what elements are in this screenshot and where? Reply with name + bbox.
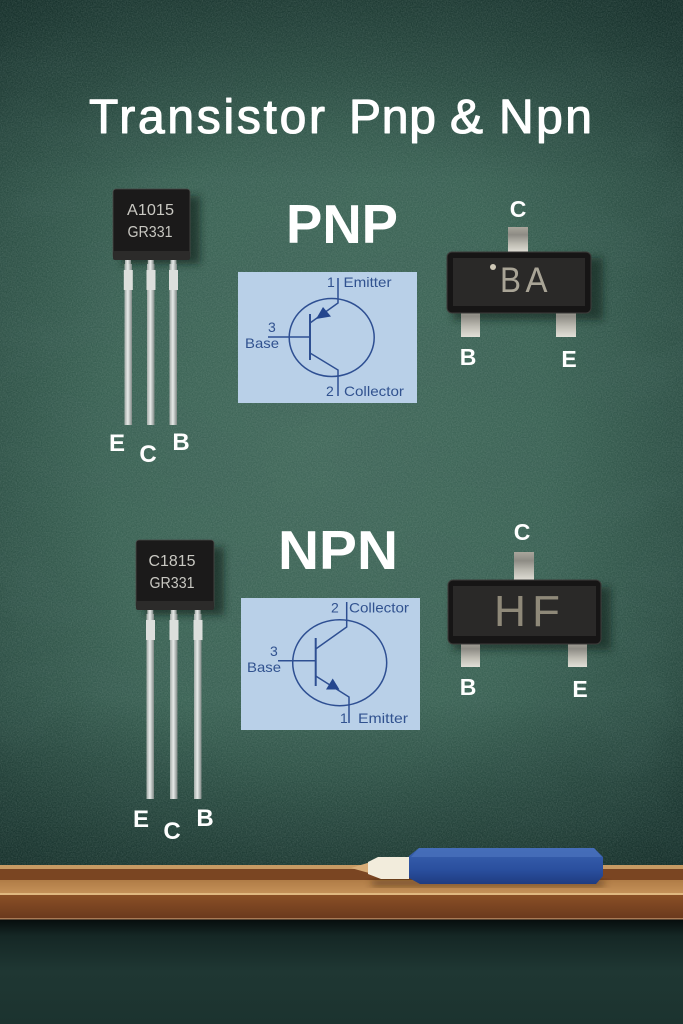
- package: [447, 252, 591, 313]
- arrow: [326, 678, 340, 690]
- package: [136, 540, 214, 609]
- pin labels: PNP through-hole: [109, 429, 190, 468]
- blue barrel: [409, 848, 603, 884]
- pin labels: PNP SMD: C: [510, 196, 526, 222]
- pin labels: NPN SMD: E: [572, 676, 588, 702]
- package marking: C1815: [148, 553, 196, 570]
- shadow: [145, 547, 224, 615]
- wood tip: [351, 862, 369, 873]
- pin labels: NPN SMD: B: [460, 674, 476, 700]
- pin labels: PNP SMD: [460, 196, 577, 372]
- pin labels: PNP through-hole: C: [139, 441, 157, 468]
- labels: Collector: [349, 600, 409, 616]
- labels: 2: [326, 383, 334, 399]
- labels: Emitter: [358, 710, 408, 726]
- shadow: [453, 258, 603, 320]
- pin labels: NPN through-hole: E: [133, 806, 149, 833]
- marking: F: [532, 587, 560, 636]
- package: [448, 580, 601, 644]
- NPN schematic card: [241, 598, 420, 730]
- wooden chalk ledge: [0, 865, 683, 920]
- title: [89, 91, 592, 144]
- labels: 3: [268, 319, 276, 335]
- marking: H: [494, 587, 526, 636]
- title: Pnp: [349, 91, 436, 144]
- labels: Base: [247, 659, 281, 675]
- heading: NPN: NPN: [278, 519, 398, 581]
- shadow on ledge: [372, 880, 604, 886]
- PNP through-hole transistor A1015: [113, 189, 200, 425]
- shadow: [122, 196, 200, 264]
- pin labels: NPN through-hole: B: [196, 805, 214, 832]
- labels: 3: [270, 643, 278, 659]
- labels: Base: [245, 335, 279, 351]
- dark wall below ledge: [0, 919, 683, 1024]
- white collar: [368, 857, 409, 879]
- symbol: [268, 278, 374, 396]
- labels: 2: [331, 600, 339, 616]
- package marking: A1015: [127, 202, 174, 219]
- marking: B: [500, 261, 521, 300]
- NPN through-hole transistor C1815: [136, 540, 224, 799]
- pin labels: PNP SMD: E: [561, 346, 577, 372]
- labels: 1: [327, 274, 335, 290]
- package marking: [148, 553, 196, 592]
- marking: [494, 587, 560, 636]
- heading: PNP: PNP: [286, 193, 398, 255]
- leads: [508, 227, 528, 253]
- title: Transistor: [89, 91, 325, 144]
- NPN SMD transistor HF: [448, 552, 611, 667]
- pin labels: NPN SMD: [460, 519, 588, 702]
- package: [113, 189, 190, 259]
- title: &: [450, 91, 483, 144]
- labels: Collector: [344, 383, 404, 399]
- marking: A: [526, 261, 548, 300]
- labels: Emitter: [344, 274, 392, 290]
- labels: [245, 274, 404, 399]
- arrow: [316, 307, 331, 319]
- labels: 1: [340, 710, 348, 726]
- package marking: GR331: [150, 575, 195, 592]
- pin labels: NPN through-hole: C: [163, 818, 181, 845]
- title: Npn: [499, 91, 592, 144]
- pin labels: NPN through-hole: [133, 805, 214, 845]
- leads: [146, 605, 202, 799]
- pin labels: NPN SMD: C: [514, 519, 530, 545]
- pin labels: PNP through-hole: E: [109, 430, 125, 457]
- package marking: GR331: [128, 224, 173, 241]
- pin labels: PNP through-hole: B: [172, 429, 190, 456]
- pin labels: PNP SMD: B: [460, 344, 476, 370]
- package marking: [127, 202, 174, 241]
- pencil: [351, 848, 604, 886]
- labels: [247, 600, 409, 726]
- PNP schematic card: [238, 272, 417, 403]
- symbol: [278, 602, 387, 723]
- pin one dot: [490, 264, 496, 270]
- PNP SMD transistor BA: [447, 227, 603, 337]
- leads: [124, 255, 178, 425]
- leads: [514, 552, 534, 581]
- marking: [500, 261, 548, 300]
- shadow: [453, 587, 611, 650]
